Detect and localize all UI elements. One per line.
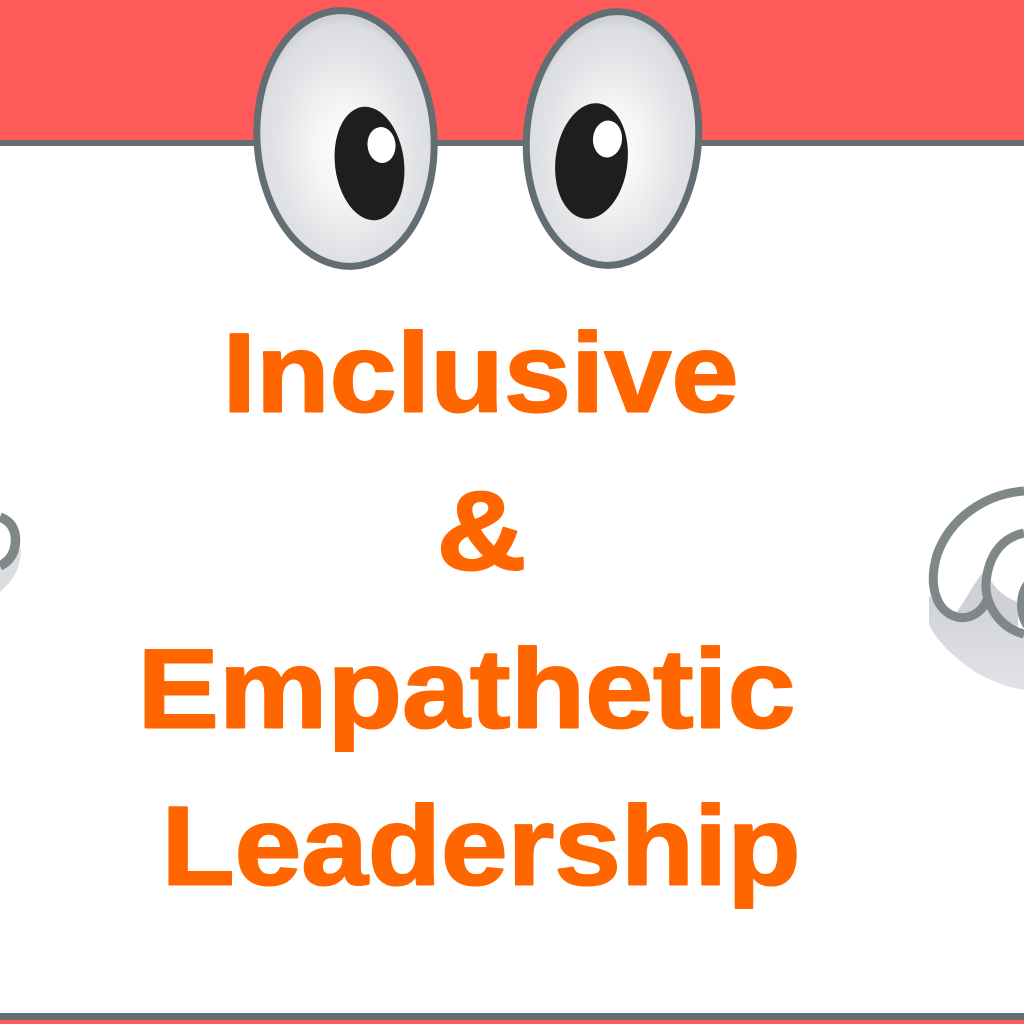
icon: right eye <box>518 6 707 271</box>
title line: Leadership: Leadership <box>162 784 800 908</box>
title <box>138 310 800 908</box>
title line: Inclusive: Inclusive <box>222 310 738 436</box>
title line: Empathetic: Empathetic <box>138 626 796 752</box>
top red band <box>0 0 1024 146</box>
title line: ampersand: & <box>436 468 526 594</box>
icon: left eye <box>249 5 442 272</box>
icon: left hand fingertip <box>0 517 21 592</box>
bottom red band <box>0 1013 1024 1024</box>
icon: right hand fingers <box>929 491 1024 690</box>
